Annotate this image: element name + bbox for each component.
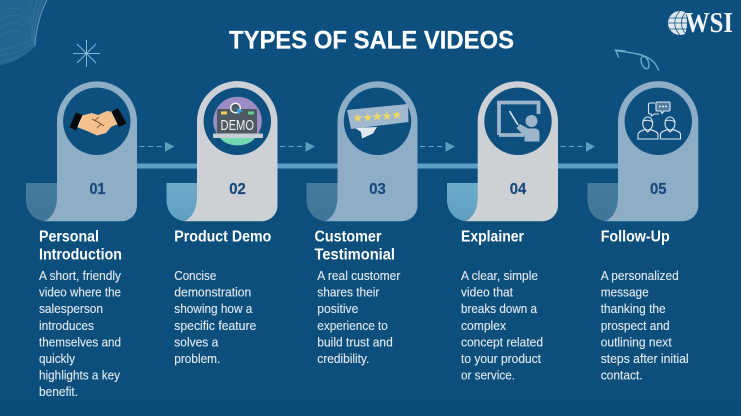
number 03: 03 <box>369 181 386 198</box>
heading: Product Demo: Product Demo <box>174 228 271 246</box>
icon: star rating banner: ★ <box>382 109 392 123</box>
body: Personal Introduction: A short, friendly <box>39 268 122 283</box>
decorative wave pattern <box>0 0 47 65</box>
body: Product Demo: Concise <box>174 268 216 283</box>
body: Personal Introduction: quickly <box>39 351 76 366</box>
connector line <box>137 164 618 168</box>
icon: two people talking <box>638 102 680 139</box>
body: Explainer: or service. <box>461 368 515 383</box>
icon: demo laptop <box>213 97 263 145</box>
number 04: 04 <box>510 181 527 198</box>
body: Product Demo: specific feature <box>174 318 256 333</box>
body: Customer Testimonial <box>317 268 401 366</box>
body: Follow-Up <box>601 268 689 383</box>
logo: WSI <box>668 7 733 39</box>
body: Follow-Up: contact. <box>601 368 643 383</box>
arrow 1 to 2 <box>140 142 174 152</box>
icon: curly arrow <box>616 50 658 70</box>
body: Personal Introduction <box>39 268 122 399</box>
card 03 <box>306 81 418 221</box>
heading: Personal Introduction: Personal <box>39 228 99 246</box>
body: Product Demo: demonstration <box>174 285 251 300</box>
body: Product Demo <box>174 268 256 366</box>
body: Explainer: complex <box>461 318 507 333</box>
arrow 2 to 3 <box>280 142 315 152</box>
icon: asterisk spark <box>73 40 100 67</box>
body: Explainer: to your product <box>461 351 541 366</box>
body: Customer Testimonial: A real customer <box>317 268 401 283</box>
body: Product Demo: solves a <box>174 334 219 349</box>
icon: star rating banner: ★ <box>372 110 383 124</box>
title: TYPES OF SALE VIDEOS <box>229 26 514 54</box>
body: Personal Introduction: introduces <box>39 318 94 333</box>
column 2 text <box>174 228 271 366</box>
body: Customer Testimonial: build trust and <box>317 334 393 349</box>
card 01 <box>26 81 137 221</box>
body: Customer Testimonial: positive <box>317 301 358 316</box>
icon: handshake <box>70 108 126 136</box>
body: Follow-Up: thanking the <box>601 301 666 316</box>
heading: Customer Testimonial: Testimonial <box>314 246 395 264</box>
body: Personal Introduction: benefit. <box>39 384 78 399</box>
number 05: 05 <box>650 181 667 198</box>
body: Explainer <box>461 268 543 383</box>
card 02 <box>166 81 278 221</box>
body: Customer Testimonial: shares their <box>317 285 380 300</box>
body: Personal Introduction: themselves and <box>39 334 121 349</box>
card 05 <box>588 81 698 221</box>
body: Explainer: breaks down a <box>461 301 538 316</box>
body: Customer Testimonial: experience to <box>317 318 388 333</box>
body: Personal Introduction: salesperson <box>39 301 103 316</box>
column 5 text <box>601 228 689 383</box>
column 4 text <box>461 228 543 383</box>
heading: Customer Testimonial: Customer <box>314 228 382 246</box>
body: Follow-Up: outlining next <box>601 334 672 349</box>
heading: Personal Introduction: Introduction <box>39 246 122 264</box>
body: Follow-Up: prospect and <box>601 318 670 333</box>
body: Personal Introduction: video where the <box>39 285 121 300</box>
heading: Customer Testimonial <box>314 228 395 264</box>
logo: WSI: WSI <box>685 7 733 39</box>
body: Explainer: A clear, simple <box>461 268 538 283</box>
column 1 text <box>39 228 122 399</box>
icon: star rating banner: ★ <box>362 110 373 124</box>
heading: Explainer: Explainer <box>461 228 524 246</box>
number 02: 02 <box>229 181 246 198</box>
body: Follow-Up: A personalized <box>601 268 679 283</box>
icon: demo laptop: DEMO <box>220 117 254 134</box>
body: Product Demo: showing how a <box>174 301 253 316</box>
body: Follow-Up: steps after initial <box>601 351 689 366</box>
column 3 text <box>314 228 401 366</box>
arrow 3 to 4 <box>420 142 455 152</box>
icon: teacher at board <box>499 102 540 142</box>
number 01: 01 <box>90 181 106 198</box>
body: Explainer: concept related <box>461 334 543 349</box>
card 04 <box>447 81 558 221</box>
heading: Personal Introduction <box>39 228 122 264</box>
icon: star rating banner <box>347 104 408 138</box>
body: Customer Testimonial: credibility. <box>317 351 369 366</box>
icon: star rating banner: ★ <box>391 108 402 122</box>
body: Explainer: video that <box>461 285 513 300</box>
arrow 4 to 5 <box>560 142 595 152</box>
icon: star rating banner: ★ <box>352 111 363 125</box>
body: Personal Introduction: highlights a key <box>39 368 121 383</box>
body: Product Demo: problem. <box>174 351 220 366</box>
heading: Follow-Up: Follow-Up <box>601 228 670 246</box>
body: Follow-Up: message <box>601 285 649 300</box>
